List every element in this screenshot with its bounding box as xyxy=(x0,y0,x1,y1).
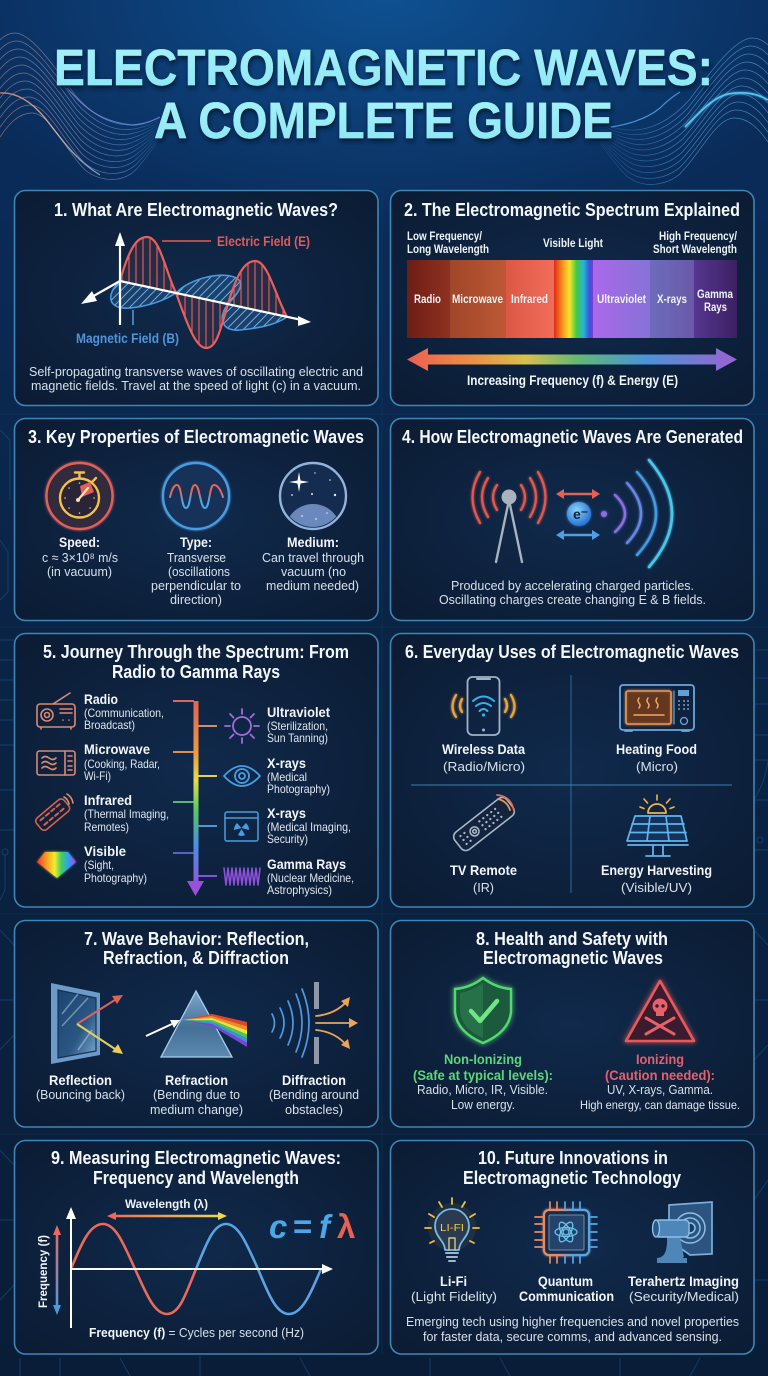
text: x-rays photography xyxy=(267,755,330,796)
heading 5: Radio to Gamma Rays xyxy=(112,662,280,682)
heading 1: 1. What Are Electromagnetic Waves? xyxy=(54,200,338,220)
icon: microwave oven xyxy=(620,685,694,731)
label: frequency axis: Frequency (f) xyxy=(36,1235,50,1308)
high frequency label: Short Wavelength xyxy=(653,242,737,256)
text: non-ionizing: Radio, Micro, IR, Visible. xyxy=(417,1082,548,1097)
formula: c xyxy=(269,1208,287,1245)
icon: ultraviolet sun xyxy=(225,709,259,743)
text: infrared xyxy=(84,792,169,834)
text: medium: medium needed) xyxy=(266,578,359,593)
formula: λ xyxy=(337,1208,355,1245)
text: visible: (Sight, xyxy=(84,858,114,872)
panel 8: health and safety xyxy=(390,920,754,1127)
text: refraction xyxy=(150,1072,243,1117)
text: medium xyxy=(262,534,364,593)
text: gamma rays: Gamma Rays xyxy=(267,856,346,872)
heading 10: 10. Future Innovations in xyxy=(478,1148,668,1168)
text: heating food: (Micro) xyxy=(636,759,678,774)
text: diffraction: Diffraction xyxy=(282,1072,346,1088)
text: type: direction) xyxy=(170,592,222,607)
text: non-ionizing xyxy=(413,1051,553,1112)
arrow: frequency xyxy=(53,1225,61,1315)
text: wireless data: Wireless Data xyxy=(442,741,525,757)
text: speed: c ≈ 3×10⁸ m/s xyxy=(42,550,118,565)
panel 3: key properties xyxy=(14,418,378,620)
right bright cyan strand xyxy=(685,93,768,127)
text: x-rays photography: Photography) xyxy=(267,782,330,796)
text: non-ionizing: Non-Ionizing xyxy=(444,1051,522,1067)
description: Oscillating charges create changing E & B fields. xyxy=(439,592,706,607)
text: wireless data xyxy=(442,741,525,774)
text: type xyxy=(151,534,241,607)
arrow: increasing frequency xyxy=(407,348,737,371)
icon: gamma wave xyxy=(224,868,260,885)
label: magnetic field: Magnetic Field (B) xyxy=(76,331,179,346)
description: Self-propagating transverse waves of oscillating electric and xyxy=(29,364,363,379)
text: infrared: (Thermal Imaging, xyxy=(84,807,169,821)
title: ELECTROMAGNETIC WAVES: xyxy=(54,39,713,96)
text: ultraviolet: Ultraviolet xyxy=(267,704,330,720)
text: microwave: Microwave xyxy=(84,741,150,757)
icon: rainbow gem xyxy=(37,852,76,878)
text: x-rays photography: (Medical xyxy=(267,770,307,784)
text: speed xyxy=(42,534,118,579)
spectrum bar xyxy=(407,260,737,338)
text: terahertz imaging: (Security/Medical) xyxy=(629,1289,739,1304)
spectrum bar: Radio xyxy=(414,292,441,306)
text: speed: Speed: xyxy=(59,534,100,550)
icon: microwave xyxy=(37,751,75,775)
text: gamma rays xyxy=(267,856,354,897)
wave diagram xyxy=(81,232,311,348)
heading 9: Frequency and Wavelength xyxy=(93,1168,299,1188)
text: reflection: Reflection xyxy=(49,1072,112,1088)
text: tv remote xyxy=(450,862,517,895)
text: radio xyxy=(84,691,164,732)
icon: infrared remote xyxy=(34,794,73,832)
text: tv remote: (IR) xyxy=(473,880,494,895)
text: wireless data: (Radio/Micro) xyxy=(443,759,525,774)
left wave strands xyxy=(0,33,160,180)
text: x-rays imaging xyxy=(267,805,351,846)
text: gamma rays: (Nuclear Medicine, xyxy=(267,871,354,885)
text: radio: Radio xyxy=(84,691,118,707)
text: diffraction xyxy=(269,1072,359,1117)
text: quantum communication xyxy=(519,1273,614,1304)
text: li-fi xyxy=(411,1273,497,1304)
heading 2: 2. The Electromagnetic Spectrum Explained xyxy=(404,200,740,220)
text: heating food xyxy=(616,741,697,774)
heading 3: 3. Key Properties of Electromagnetic Waves xyxy=(28,427,364,447)
spectrum bar: Microwave xyxy=(452,292,503,306)
icon: mirror reflection xyxy=(51,983,123,1064)
text: diffraction: obstacles) xyxy=(285,1102,343,1117)
text: ionizing xyxy=(580,1051,740,1112)
heading 9 xyxy=(51,1148,341,1188)
high frequency label: High Frequency/ xyxy=(659,229,738,243)
text: visible: Visible xyxy=(84,843,126,859)
text: non-ionizing: Low energy. xyxy=(451,1097,515,1112)
text: type: Transverse xyxy=(167,550,226,565)
heading 5: 5. Journey Through the Spectrum: From xyxy=(43,642,349,662)
spectrum bar: X-rays xyxy=(657,292,687,306)
text: medium: Medium: xyxy=(287,534,339,550)
text: ultraviolet: Sun Tanning) xyxy=(267,731,328,745)
text: refraction: medium change) xyxy=(150,1102,243,1117)
icon: green shield xyxy=(455,978,511,1043)
text: li-fi: (Light Fidelity) xyxy=(411,1289,497,1304)
arrow: red oscillation xyxy=(556,489,600,499)
panel 1: what are electromagnetic waves xyxy=(14,190,378,406)
text: microwave xyxy=(84,741,160,783)
panel 7: wave behavior xyxy=(14,920,378,1127)
icon: radio xyxy=(37,693,75,729)
chart: sine wave with axes xyxy=(66,1207,333,1328)
text: speed: (in vacuum) xyxy=(47,564,112,579)
heading 10: Electromagnetic Technology xyxy=(463,1168,681,1188)
spectrum bar: Infrared xyxy=(511,292,548,306)
text: reflection: (Bouncing back) xyxy=(36,1087,125,1102)
icon: electron xyxy=(567,502,591,526)
arrow: blue oscillation xyxy=(556,530,600,540)
text: radio: Broadcast) xyxy=(84,718,135,732)
icon: emitted wave fronts xyxy=(601,460,672,567)
text: x-rays imaging: X-rays xyxy=(267,805,306,821)
panel 6: everyday uses xyxy=(390,634,754,907)
text: type: (oscillations xyxy=(168,564,230,579)
text: ionizing: Ionizing xyxy=(636,1051,684,1067)
panel 2: spectrum explained xyxy=(390,190,754,406)
header wave lines xyxy=(0,33,768,185)
description xyxy=(29,364,363,393)
text: ionizing: (Caution needed): xyxy=(605,1067,715,1083)
icon: stopwatch xyxy=(46,463,112,529)
icon: hazard triangle xyxy=(626,981,694,1041)
title: A COMPLETE GUIDE xyxy=(154,92,613,149)
icon: tv remote xyxy=(451,795,517,853)
low frequency label: Low Frequency/ xyxy=(407,229,483,243)
spectrum bar: Gamma xyxy=(697,287,733,301)
heading 7: 7. Wave Behavior: Reflection, xyxy=(84,929,309,949)
spectrum bar: Ultraviolet xyxy=(597,292,646,306)
formula: f xyxy=(319,1208,333,1245)
text: type: perpendicular to xyxy=(151,578,241,593)
icon: terahertz scanner xyxy=(652,1202,712,1263)
heading 7 xyxy=(84,929,309,968)
icon: x-ray window xyxy=(225,812,258,841)
heading 8: Electromagnetic Waves xyxy=(483,948,663,968)
icon: eye xyxy=(224,766,260,786)
text: diffraction: (Bending around xyxy=(269,1087,359,1102)
text: visible: Photography) xyxy=(84,871,147,885)
icon: vacuum of space xyxy=(278,462,348,530)
formula: = xyxy=(293,1208,312,1245)
icon: phone with wifi xyxy=(452,677,514,735)
text: ionizing: High energy, can damage tissue. xyxy=(580,1098,740,1112)
caption: increasing frequency: Increasing Frequency (f) & Energy (E) xyxy=(467,372,678,388)
text: tv remote: TV Remote xyxy=(450,862,517,878)
icon: li-fi bulb: LI-FI xyxy=(440,1223,464,1234)
text: infrared: Infrared xyxy=(84,792,132,808)
spectrum bar: Rays xyxy=(704,300,727,314)
text: visible xyxy=(84,843,147,885)
text: medium: vacuum (no xyxy=(281,564,346,579)
left bright orange strand xyxy=(0,93,100,175)
panel 9: measuring waves xyxy=(14,1140,378,1354)
label: electric field: Electric Field (E) xyxy=(217,234,310,249)
heading 8 xyxy=(476,929,668,968)
text: terahertz imaging xyxy=(628,1273,739,1304)
text: quantum communication: Communication xyxy=(519,1288,614,1304)
icon: transverse wave xyxy=(163,463,229,529)
text: non-ionizing: (Safe at typical levels): xyxy=(413,1067,553,1083)
left bright violet strand xyxy=(67,88,160,125)
description: magnetic fields. Travel at the speed of light (c) in a vacuum. xyxy=(31,378,361,393)
text: refraction: (Bending due to xyxy=(153,1087,240,1102)
text: radio: (Communication, xyxy=(84,706,164,720)
description: Produced by accelerating charged particles. xyxy=(451,578,694,593)
heading 10 xyxy=(463,1148,681,1188)
text: x-rays photography: X-rays xyxy=(267,755,306,771)
icon: solar panel xyxy=(627,795,688,856)
visible light label: Visible Light xyxy=(543,236,603,250)
panel 4: how waves are generated xyxy=(390,418,754,620)
label: wavelength: Wavelength (λ) xyxy=(125,1197,208,1211)
icon: antenna with red waves xyxy=(472,472,546,562)
text: ultraviolet: (Sterilization, xyxy=(267,719,328,733)
heading 5 xyxy=(43,642,349,682)
description xyxy=(406,1314,739,1344)
icon: quantum chip xyxy=(535,1202,597,1263)
right wave strands xyxy=(600,38,768,185)
caption: frequency definition: Frequency (f) = Cycles per second (Hz) xyxy=(89,1325,304,1340)
text: x-rays imaging: (Medical Imaging, xyxy=(267,820,351,834)
low frequency label xyxy=(407,229,489,256)
text: li-fi: Li-Fi xyxy=(440,1273,467,1289)
right bright blue strand xyxy=(611,92,680,127)
low frequency label: Long Wavelength xyxy=(407,242,489,256)
formula xyxy=(269,1208,355,1245)
description: for faster data, secure comms, and advanced sensing. xyxy=(423,1329,722,1344)
icon: electron: e⁻ xyxy=(573,506,588,522)
text: energy harvesting: (Visible/UV) xyxy=(621,880,692,895)
spectrum timeline arrow xyxy=(173,701,217,896)
panel 5: journey through the spectrum xyxy=(14,634,378,907)
text: medium: Can travel through xyxy=(262,550,364,565)
heading 9: 9. Measuring Electromagnetic Waves: xyxy=(51,1148,341,1168)
text: type: Type: xyxy=(180,534,212,550)
text: x-rays imaging: Security) xyxy=(267,832,308,846)
icon: slit diffraction xyxy=(272,982,358,1064)
text: infrared: Remotes) xyxy=(84,820,129,834)
text: microwave: (Cooking, Radar, xyxy=(84,757,160,771)
text: energy harvesting xyxy=(601,862,712,895)
heading 8: 8. Health and Safety with xyxy=(476,929,668,949)
panel 10: future innovations xyxy=(390,1140,754,1354)
description xyxy=(439,578,706,607)
description: Emerging tech using higher frequencies and novel properties xyxy=(406,1314,739,1329)
text: ultraviolet xyxy=(267,704,330,745)
title xyxy=(54,39,713,149)
icon: li-fi bulb xyxy=(425,1198,479,1261)
text: gamma rays: Astrophysics) xyxy=(267,883,332,897)
text: terahertz imaging: Terahertz Imaging xyxy=(628,1273,739,1289)
text: microwave: Wi-Fi) xyxy=(84,769,111,783)
icon: prism refraction xyxy=(146,991,247,1057)
arrow: wavelength xyxy=(107,1212,227,1220)
high frequency label xyxy=(653,229,738,256)
text: quantum communication: Quantum xyxy=(538,1273,593,1289)
text: ionizing: UV, X-rays, Gamma. xyxy=(607,1082,713,1097)
text: reflection xyxy=(36,1072,125,1102)
text: refraction: Refraction xyxy=(165,1072,228,1088)
text: heating food: Heating Food xyxy=(616,741,697,757)
text: energy harvesting: Energy Harvesting xyxy=(601,862,712,878)
heading 7: Refraction, & Diffraction xyxy=(103,948,289,968)
